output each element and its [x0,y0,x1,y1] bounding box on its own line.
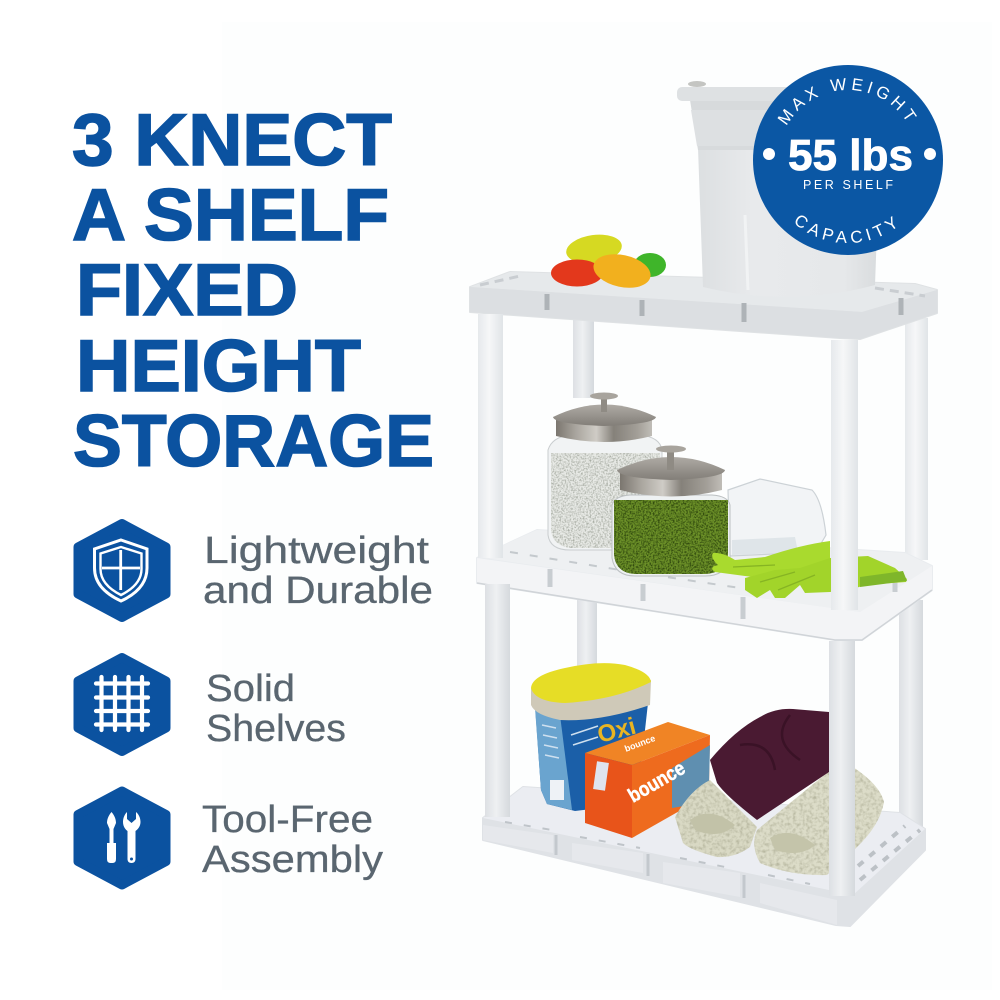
title: FIXED [76,250,298,331]
laundry tub [531,663,651,811]
bucket [677,81,890,297]
back legs, lower [577,600,923,828]
icon: shield in hexagon [78,524,166,618]
badge: max weight 55 lbs: CAPACITY [796,216,896,243]
product photo: three-tier shelf with items [470,81,937,926]
small jar with green contents [612,446,730,576]
icon: tools in hexagon [78,791,166,885]
badge: max weight 55 lbs [753,65,943,255]
sponges [551,231,666,293]
feature label: solid shelves: Shelves [206,708,346,750]
gloves [712,541,907,598]
feature label: solid shelves: Solid [206,668,295,710]
front legs, upper [478,314,858,610]
feature: solid shelves [78,658,346,752]
feature: lightweight and durable [78,524,433,618]
feature label: tool-free assembly: Tool-Free [202,799,373,841]
top shelf [470,272,937,339]
feature label: lightweight and durable: Lightweight [204,530,430,572]
glass mug [728,479,826,556]
badge: max weight 55 lbs: MAX WEIGHT [778,78,917,125]
beige towels [675,767,884,875]
middle shelf [477,530,932,640]
icon: grid in hexagon [78,658,166,752]
badge: max weight 55 lbs: 55 lbs [788,131,913,180]
purple towel [710,709,829,820]
dryer sheets box: bounce [624,757,689,807]
bottom shelf [483,787,925,926]
back legs, upper [573,318,928,560]
dryer sheets box: bounce [623,733,657,754]
laundry tub: Oxi [595,713,639,749]
title: STORAGE [73,401,434,482]
feature label: tool-free assembly: Assembly [202,839,383,881]
large jar with white contents [548,392,662,550]
title [72,100,434,482]
feature: tool-free assembly [78,791,383,885]
title: 3 KNECT [72,100,392,181]
title: HEIGHT [76,326,361,407]
dryer sheets box [585,722,710,838]
title: A SHELF [72,175,389,256]
feature label: lightweight and durable: and Durable [203,570,433,612]
badge: max weight 55 lbs: PER SHELF [803,178,893,192]
front legs, lower [485,584,855,896]
